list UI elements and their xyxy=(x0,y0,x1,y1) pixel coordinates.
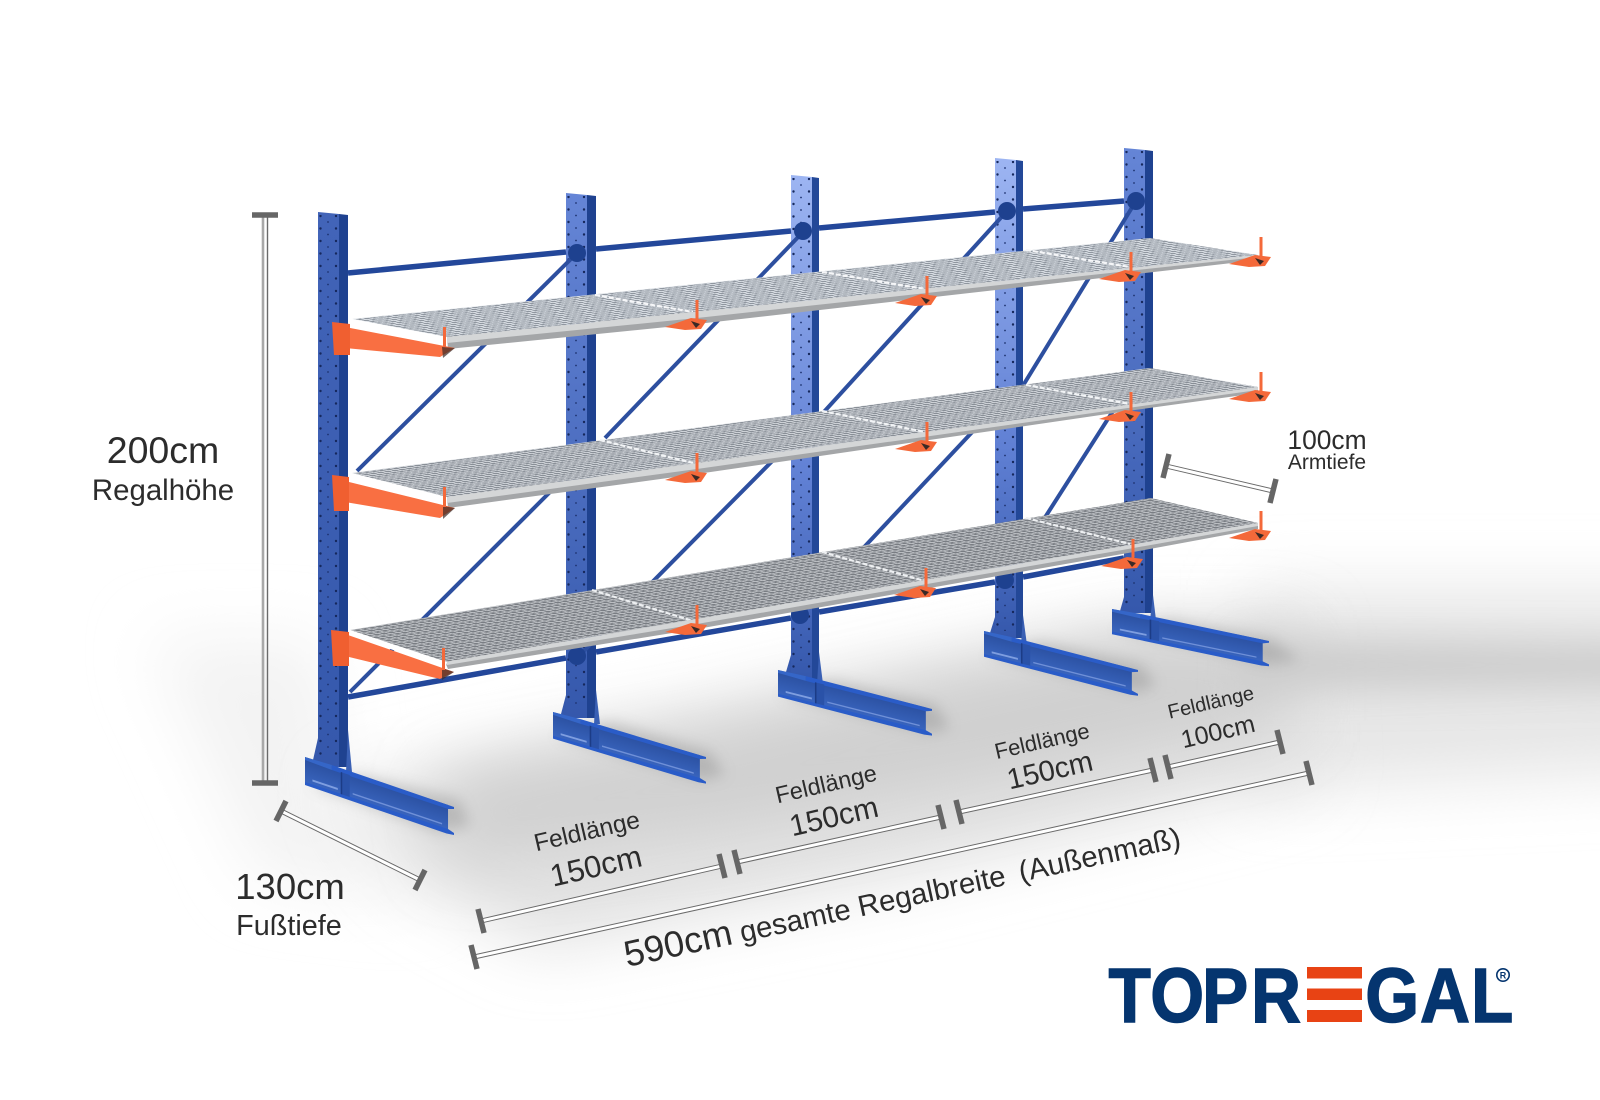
foot 3 xyxy=(778,669,932,737)
label: 100cm Armtiefe xyxy=(1287,425,1367,474)
label: 200cm Regalhöhe: Regalhöhe xyxy=(92,474,234,507)
foot 1 xyxy=(305,756,454,836)
white rim xyxy=(350,474,447,508)
front edge xyxy=(447,255,1258,349)
label: bay 4 length: Feldlänge xyxy=(1166,682,1256,724)
bracket xyxy=(332,475,455,519)
dimension: height 200cm xyxy=(252,215,278,784)
label: 100cm Armtiefe: 100cm xyxy=(1287,425,1367,455)
dimension: total width 590cm xyxy=(471,761,1312,969)
bracket xyxy=(331,630,454,680)
dimension: bay 3 xyxy=(956,758,1156,824)
dimension: bay 4 xyxy=(1165,730,1283,779)
label: 130cm Fußtiefe: Fußtiefe xyxy=(236,910,342,942)
label: 130cm Fußtiefe: 130cm xyxy=(235,866,345,907)
post 2 xyxy=(566,193,596,718)
rod hubs xyxy=(568,192,1145,665)
label: bay 4 length: 100cm xyxy=(1178,710,1258,754)
logo: TOPREGAL: TOPR xyxy=(1109,953,1301,1039)
bracket xyxy=(332,322,455,358)
logo: TOPREGAL: GAL xyxy=(1365,953,1513,1039)
front edge xyxy=(447,387,1258,508)
label: bay 3 length xyxy=(992,718,1096,796)
shelf 2 middle level xyxy=(332,368,1271,519)
label: 200cm Regalhöhe xyxy=(92,429,234,507)
label: bay 1 length: Feldlänge xyxy=(532,807,642,857)
label: bay 4 length xyxy=(1166,682,1258,754)
foot 5 xyxy=(1112,608,1269,667)
logo: TOPREGAL: R xyxy=(1500,970,1507,980)
label: bay 2 length xyxy=(773,760,882,843)
upright posts xyxy=(318,148,1153,767)
deck grating xyxy=(352,238,1258,337)
label: bay 1 length xyxy=(532,807,645,894)
post 4 xyxy=(995,158,1023,638)
front edge xyxy=(445,523,1258,669)
label: bay 3 length: 150cm xyxy=(1004,746,1096,796)
label: 590cm gesamte Regalbreite: 590cm gesamte Regalbreite (Außenmaß) xyxy=(620,815,1184,975)
support arm tips xyxy=(665,237,1271,330)
support arm tips xyxy=(665,511,1271,635)
dimension: arm depth 100cm xyxy=(1163,454,1276,503)
support arm tips xyxy=(665,372,1271,483)
panel joints xyxy=(592,518,1130,621)
label: 200cm Regalhöhe: 200cm xyxy=(107,429,219,471)
white rim xyxy=(350,630,447,668)
shelf 3 bottom level xyxy=(331,498,1271,680)
post 1 xyxy=(318,212,348,767)
logo: TOPREGAL xyxy=(1109,953,1513,1039)
dimension: bay 1 xyxy=(478,854,725,933)
top horizontal rods xyxy=(348,201,1124,273)
deck grating xyxy=(352,368,1258,497)
panel joints xyxy=(600,385,1130,463)
foot contact shadows xyxy=(310,620,1300,832)
white rim xyxy=(350,319,447,347)
label: 100cm Armtiefe: Armtiefe xyxy=(1288,451,1366,474)
label: 130cm Fußtiefe xyxy=(235,866,345,942)
floor shadow xyxy=(150,590,1600,950)
bottom horizontal rods xyxy=(348,558,1124,697)
dimension: foot depth 130cm xyxy=(276,801,425,890)
panel joints xyxy=(595,250,1130,312)
post 3 xyxy=(791,175,819,680)
foot 2 xyxy=(553,711,706,785)
label: bay 3 length: Feldlänge xyxy=(992,718,1092,764)
post 5 xyxy=(1124,148,1153,613)
label: bay 2 length: Feldlänge xyxy=(773,760,879,808)
diagonal braces xyxy=(350,201,1136,692)
label: bay 1 length: 150cm xyxy=(547,838,645,894)
label: bay 2 length: 150cm xyxy=(786,791,882,843)
foot 4 xyxy=(984,630,1138,697)
shelf 1 top level xyxy=(332,237,1271,358)
deck grating xyxy=(350,498,1258,662)
base feet xyxy=(305,595,1269,836)
dimension: bay 2 xyxy=(734,805,944,874)
